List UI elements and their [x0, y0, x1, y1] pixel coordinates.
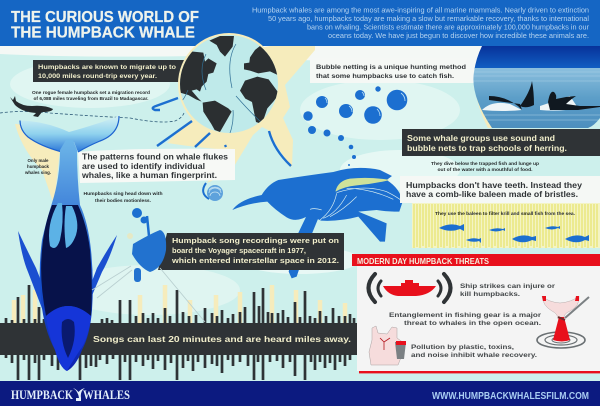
lunge note: out of the water with a mouthful of food. [438, 167, 532, 172]
fluke patterns text: The patterns found on whale flukes [82, 152, 229, 162]
icon: fingerprint [203, 183, 223, 201]
intro paragraph: 50 years ago, humpbacks today are making a slow but remarkable recovery, thanks to international [268, 16, 589, 23]
panel: threats [352, 254, 600, 373]
voyager callout: board the Voyager spacecraft in 1977, [172, 246, 306, 255]
migration callout [33, 60, 185, 82]
intro paragraph: Humpback whales are among the most awe-inspiring of all marine mammals. Nearly driven to extinction [252, 8, 589, 14]
footer logo: HUMPBACK [11, 387, 74, 402]
icon: entangled tail [537, 296, 589, 348]
migration record note: of 6,088 miles traveling from Brazil to Madagascar. [34, 96, 148, 101]
title: THE CURIOUS WORLD OF [11, 9, 199, 26]
photo: lunging whales [470, 46, 600, 128]
baleen bristles panel [412, 203, 600, 248]
migration arrows [153, 98, 291, 166]
icon: voyager spacecraft [92, 208, 205, 322]
singing note [84, 191, 163, 203]
herring callout [402, 129, 600, 156]
migration callout: 10,000 miles round-trip every year. [38, 73, 157, 80]
header band [0, 0, 600, 46]
baleen text: have a comb-like baleen made of bristles. [406, 190, 578, 199]
voyager callout [158, 233, 344, 270]
only males note: whales sing. [24, 170, 51, 175]
scandinavia and europe [244, 46, 278, 75]
herring callout: Some whale groups use sound and [407, 134, 555, 143]
entanglement text: Entanglement in fishing gear is a major [389, 312, 541, 319]
dashed migration route [0, 112, 184, 122]
footer logo [11, 387, 130, 402]
fluke patterns text: are used to identify individual [82, 162, 205, 171]
singing note: Humpbacks sing head down with [84, 191, 163, 196]
fluke patterns text [78, 149, 235, 183]
fish [439, 224, 589, 243]
greenland [209, 36, 234, 57]
pollution text [411, 344, 537, 359]
lunge note [431, 161, 539, 172]
migration callout: Humpbacks are known to migrate up to [38, 64, 176, 71]
only males note: humpback [27, 164, 50, 169]
title: THE HUMPBACK WHALE [11, 24, 195, 42]
baleen text [400, 176, 600, 203]
voyager callout: Humpback song recordings were put on [172, 236, 340, 245]
fluke patterns text: whales, like a human fingerprint. [81, 171, 217, 180]
title [11, 9, 199, 42]
bubble netting text [310, 58, 476, 83]
entanglement text: threat to whales in the open ocean. [404, 320, 541, 327]
lunge note: They dive below the trapped fish and lunge up [431, 161, 539, 166]
ship strikes text [460, 283, 555, 298]
intro paragraph: bans on whaling. Scientists estimate there are approximately 100,000 humpbacks in our [307, 24, 590, 32]
icon: humpback with baleen [232, 168, 403, 278]
footer logo: WHALES [83, 387, 130, 402]
ship strikes text: kill humpbacks. [460, 291, 520, 298]
entanglement text [389, 312, 541, 327]
icon: diving whale [18, 116, 119, 371]
footer band [0, 381, 600, 406]
pollution text: Pollution by plastic, toxins, [411, 344, 514, 351]
bubbles [303, 86, 407, 166]
migration record note: One rogue female humpback set a migration record [32, 90, 150, 95]
threats heading [352, 254, 600, 266]
pollution text: and noise inhibit whale recovery. [411, 352, 537, 359]
migration record note [32, 90, 150, 101]
baleen bristles panel: They use the baleen to filter krill and small fish from the sea. [435, 211, 575, 216]
song length caption: Songs can last 20 minutes and are heard miles away. [93, 334, 351, 344]
voyager callout: which entered interstellar space in 2012. [171, 256, 339, 265]
icon: ship with sonar [368, 274, 450, 302]
herring callout: bubble nets to trap schools of herring. [407, 144, 567, 153]
intro paragraph [252, 8, 590, 40]
icon: small whale [10, 96, 53, 117]
icon: polluted plastic bag [369, 326, 406, 365]
north america [177, 51, 217, 102]
singing note: their bodies motionless. [95, 198, 151, 203]
baleen text: Humpbacks don't have teeth. Instead they [406, 181, 583, 190]
soundwave [0, 285, 357, 380]
bubble netting text: Bubble netting is a unique hunting method [316, 64, 466, 71]
only males note: Only male [28, 158, 49, 163]
south america [203, 101, 232, 132]
threats heading: MODERN DAY HUMPBACK THREATS [357, 256, 489, 266]
only males note [24, 158, 51, 175]
ship strikes text: Ship strikes can injure or [460, 283, 555, 290]
globe [178, 33, 278, 133]
africa [240, 77, 279, 124]
intro paragraph: oceans today. We have just begun to discover how incredible these animals are. [328, 33, 589, 40]
bubble netting text: that some humpbacks use to catch fish. [316, 73, 454, 80]
